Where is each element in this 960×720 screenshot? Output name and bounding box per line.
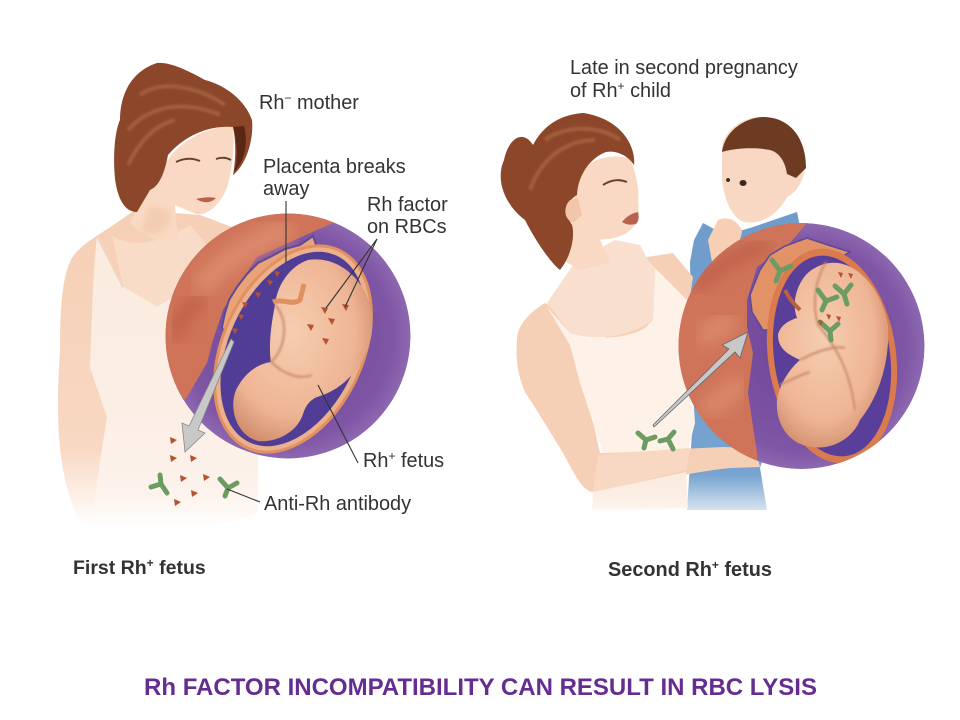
label: Rh factor on RBCs: on RBCs xyxy=(367,216,447,238)
fetus xyxy=(233,259,372,441)
caption: First Rh+ fetus: First Rh xyxy=(73,557,147,579)
maternal tissue xyxy=(166,214,334,400)
fetus xyxy=(777,263,888,448)
label: Rh+ fetus: fetus xyxy=(395,450,444,472)
facial features xyxy=(176,158,231,162)
white top xyxy=(90,236,258,531)
label: Anti-Rh antibody: Anti-Rh antibody xyxy=(264,493,411,515)
face and neck xyxy=(130,127,234,241)
arrow: second pregnancy xyxy=(653,332,748,427)
label: Late in second pregnancy: Late in second pregnancy xyxy=(570,57,798,79)
amniotic sac xyxy=(213,244,373,454)
facial features xyxy=(603,180,627,185)
leader lines xyxy=(227,201,377,502)
hair xyxy=(114,63,252,212)
placenta xyxy=(222,236,318,342)
caption: First Rh+ fetus: + xyxy=(147,556,154,570)
label: Placenta breaks away: Placenta breaks xyxy=(263,156,406,178)
chest skin highlight xyxy=(112,225,220,307)
label: Placenta breaks away: away xyxy=(263,178,309,200)
white top xyxy=(547,268,695,453)
label: Rh factor on RBCs: Rh factor xyxy=(367,194,448,216)
Rh factor on fetus xyxy=(307,304,349,345)
label: Rh- mother: Rh xyxy=(259,92,284,114)
arrow: first pregnancy xyxy=(182,339,234,452)
caption: Second Rh+ fetus: Second Rh xyxy=(608,559,712,581)
label: Late in second pregnancy: of Rh xyxy=(570,80,618,102)
icon: anti-Rh antibodies, first fetus xyxy=(151,475,237,496)
chest skin xyxy=(547,240,655,337)
label: Rh- mother: − xyxy=(284,91,291,105)
magnified circle: first pregnancy xyxy=(166,214,410,458)
mother arm and shoulders xyxy=(58,210,250,527)
face and neck xyxy=(566,157,639,270)
mother arm and shoulders xyxy=(517,253,760,492)
illustration: second Rh+ mother and child xyxy=(501,113,815,512)
antibodies on fetus xyxy=(772,260,851,340)
child hair xyxy=(722,117,806,178)
label: Rh+ fetus: + xyxy=(388,449,395,463)
caption: First Rh+ fetus: fetus xyxy=(154,557,206,579)
maternal tissue xyxy=(678,223,807,461)
label: Rh- mother: mother xyxy=(291,92,359,114)
child blue clothes xyxy=(687,212,815,510)
child facial features xyxy=(726,178,747,186)
child hand xyxy=(708,218,742,262)
caption: Second Rh+ fetus: fetus xyxy=(719,559,772,581)
amniotic sac xyxy=(766,248,898,464)
label: Late in second pregnancy: + xyxy=(618,79,625,93)
icon: anti-Rh antibodies, second fetus xyxy=(638,432,674,449)
title: Rh FACTOR INCOMPATIBILITY CAN RESULT IN RBC LYSIS xyxy=(144,674,817,701)
Rh factor on fetus xyxy=(818,272,853,326)
umbilical cord xyxy=(273,284,304,302)
label: Late in second pregnancy: child xyxy=(625,80,671,102)
child head xyxy=(722,117,805,223)
placenta xyxy=(750,238,850,330)
hair xyxy=(501,113,634,270)
Rh factor on placenta xyxy=(232,271,280,334)
illustration: first Rh+ mother xyxy=(58,63,258,531)
Rh factor particles in mother's blood xyxy=(170,437,210,506)
label: Rh+ fetus: Rh xyxy=(363,450,388,472)
magnified circle: second pregnancy xyxy=(678,223,924,469)
caption: Second Rh+ fetus: + xyxy=(712,558,719,572)
